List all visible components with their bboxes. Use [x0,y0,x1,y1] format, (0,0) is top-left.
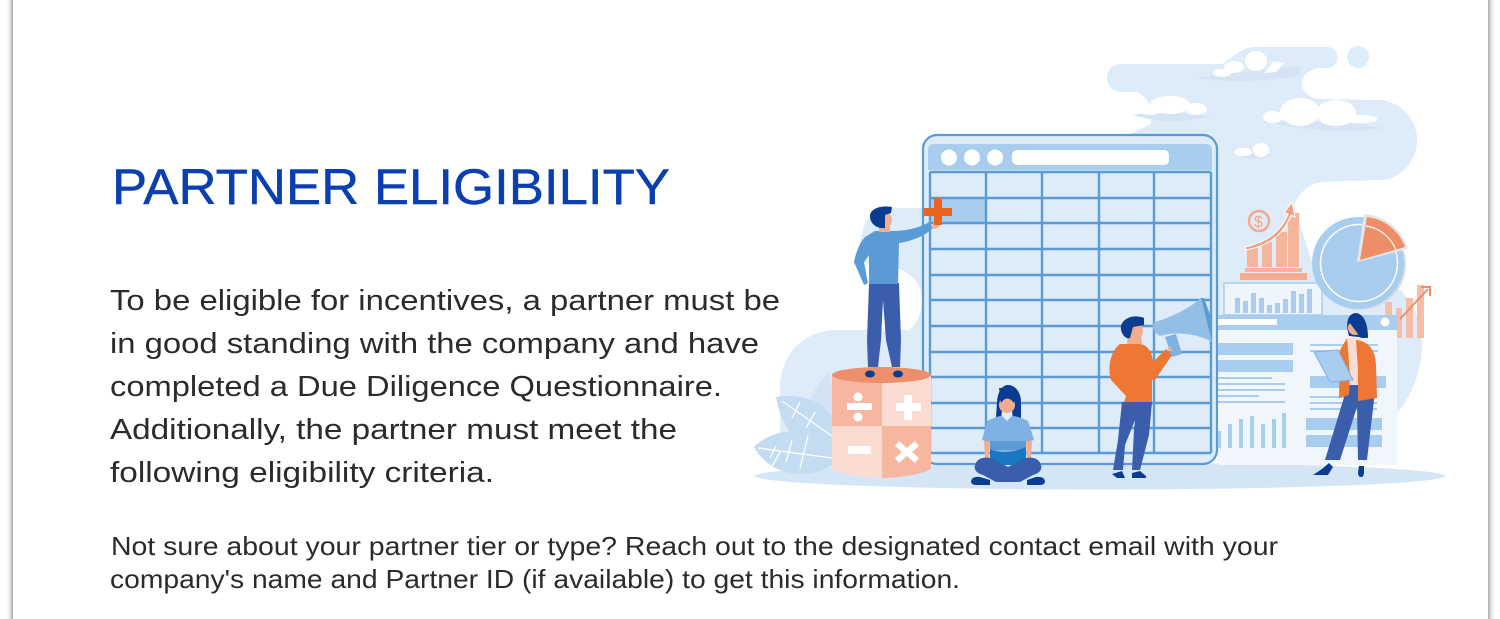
window dots [941,150,1169,166]
illustration: woman with clipboard [1313,313,1377,477]
illustration: pie chart [1312,214,1408,310]
illustration: man with megaphone [1109,316,1173,478]
illustration: money growth chart [1240,202,1307,280]
spreadsheet title bar [928,144,1212,170]
illustration: spreadsheet window [923,135,1217,464]
illustration: leaves [754,373,836,474]
text block: eligibility intro: To be eligible for incentives, a partner must be [110,285,780,317]
text block: contact note [110,531,1278,594]
text block: eligibility intro [110,285,780,489]
illustration: background sky blob [1107,46,1422,440]
text block: eligibility intro: following eligibility criteria. [110,457,494,489]
spreadsheet grid [930,172,1211,453]
illustration: left background shapes [780,208,925,470]
text block: contact note: company's name and Partner ID (if available) to get this information. [110,564,960,594]
plus sign [924,198,952,225]
text block: eligibility intro: in good standing with the company and have [110,328,759,360]
text block: eligibility intro: Additionally, the partner must meet the [110,414,677,446]
illustration: ground shadow [755,462,1445,490]
illustration: megaphone [1153,298,1212,357]
highlighted cell [930,198,986,223]
illustration: right panel background chart [1224,283,1322,315]
illustration: clouds [1133,51,1384,159]
text block: contact note: Not sure about your partner tier or type? Reach out to the designated contact email with your [111,531,1278,561]
clipboard [1314,350,1353,382]
text block: eligibility intro: completed a Due Diligence Questionnaire. [110,371,722,403]
illustration: small rising chart [1385,285,1430,338]
maths symbols [847,392,921,463]
illustration: seated woman with laptop [971,385,1045,485]
illustration: man reaching with plus sign [854,198,952,378]
dashboard content bars [1218,343,1386,448]
illustration: money growth chart: $ [1254,214,1263,231]
illustration: maths cylinder [832,367,931,478]
illustration: dashboard panel [1218,315,1397,465]
title: PARTNER ELIGIBILITY [112,159,670,215]
